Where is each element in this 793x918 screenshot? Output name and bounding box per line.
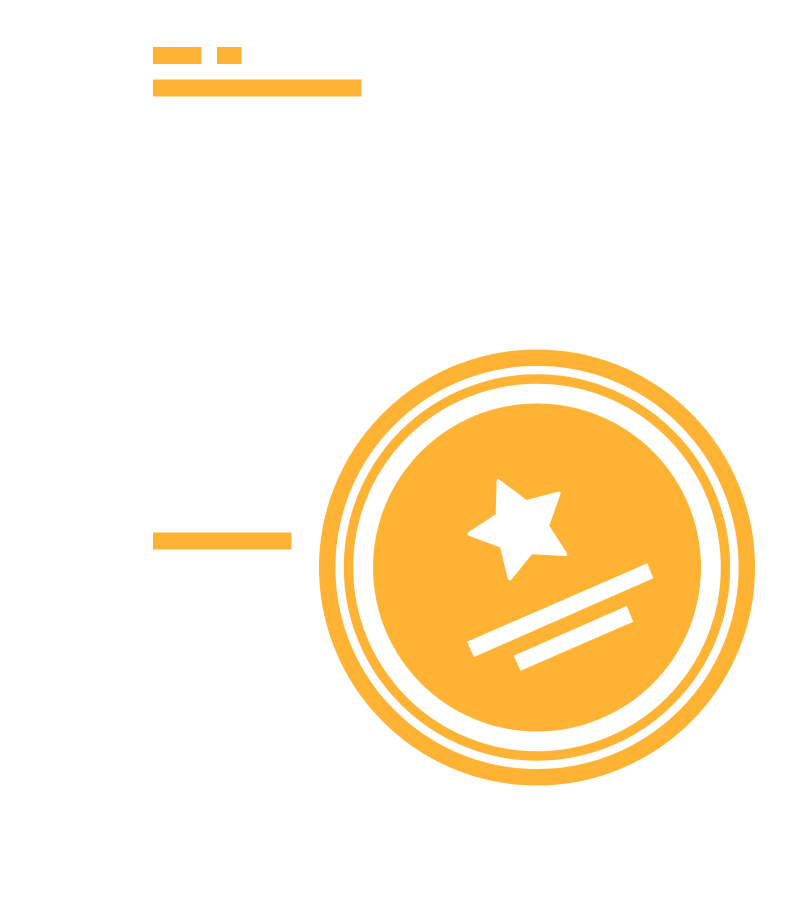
short slanted bar [514, 606, 633, 671]
outer ring [327, 358, 747, 777]
icon: star [467, 479, 567, 581]
badge [327, 358, 747, 777]
label placeholder bar [153, 532, 292, 550]
heading placeholder bars [153, 47, 362, 96]
inner disc [373, 404, 701, 732]
long slanted bar [467, 563, 653, 657]
middle ring [348, 379, 726, 756]
